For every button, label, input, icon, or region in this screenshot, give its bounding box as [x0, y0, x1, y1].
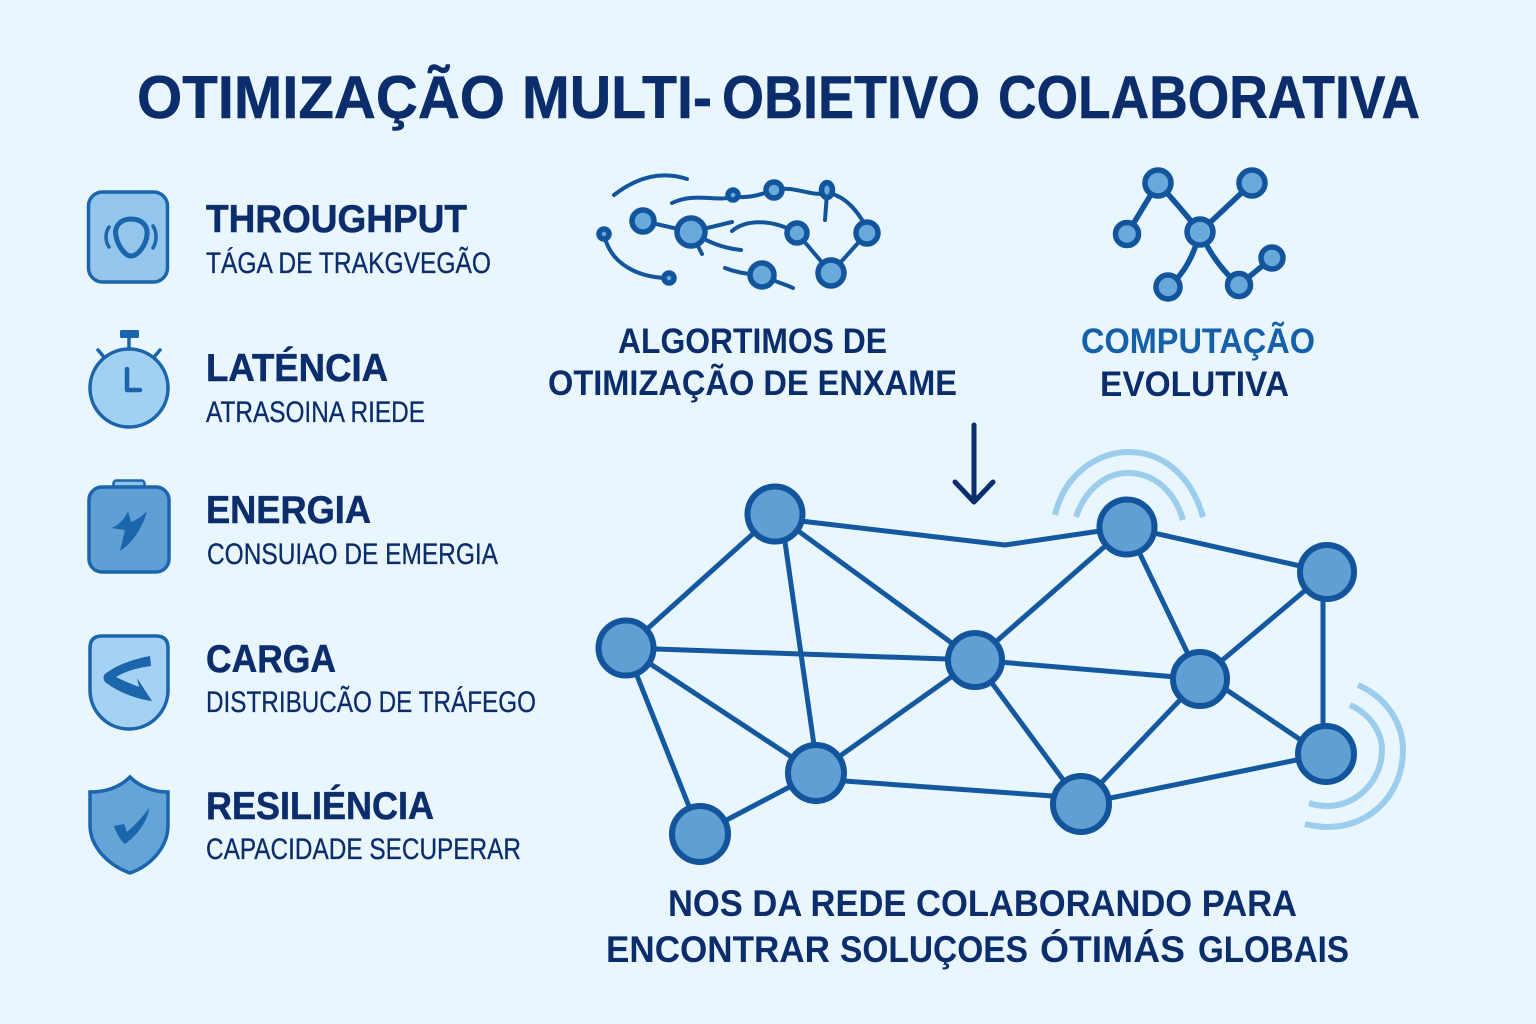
- icon: stopwatch: [90, 330, 168, 427]
- icon: battery: [89, 480, 169, 572]
- caption: network: ENCONTRAR: [606, 929, 830, 970]
- icon: load shield: [90, 636, 168, 729]
- caption: network: NOS DA REDE COLABORANDO PARA: [668, 883, 1297, 924]
- label: swarm algorithms: OTIMIZAÇÃO DE ENXAME: [548, 364, 957, 403]
- description: energy: CONSUIAO DE EMERGIA: [207, 538, 498, 571]
- description: resilience: CAPACIDADE SECUPERAR: [206, 833, 521, 866]
- title: OTIMIZAÇÃO: [137, 64, 505, 131]
- arrow: down: [955, 425, 993, 502]
- signal arcs: top node: [1055, 452, 1203, 520]
- objective: throughput: [88, 192, 491, 282]
- heading: throughput: THROUGHPUT: [206, 198, 467, 241]
- heading: energy: ENERGIA: [206, 489, 371, 532]
- caption: network: GLOBAIS: [1198, 929, 1349, 970]
- network nodes: [598, 486, 1354, 862]
- title: COLABORATIVA: [998, 64, 1420, 131]
- network diagram: [598, 452, 1403, 862]
- objective: resilience: [90, 777, 521, 873]
- heading: resilience: RESILIÉNCIA: [206, 784, 434, 828]
- caption: network: [606, 883, 1349, 970]
- panel: objectives list: [88, 192, 536, 873]
- label: swarm algorithms: ALGORTIMOS DE: [618, 322, 887, 361]
- heading: load: CARGA: [206, 638, 336, 681]
- objective: energy: [89, 480, 498, 572]
- icon: evolutionary tree: [1116, 170, 1283, 299]
- description: load: DISTRIBUCÃO DE TRÁFEGO: [206, 685, 536, 719]
- caption: network: ÓTIMÁS: [1040, 928, 1185, 970]
- icon: check shield: [90, 777, 168, 873]
- network links: [626, 514, 1327, 834]
- title: MULTI-: [522, 64, 712, 131]
- description: throughput: TÁGA DE TRAKGVEGÃO: [206, 246, 491, 280]
- label: evolutionary computing: [1081, 322, 1315, 404]
- title: OBIETIVO: [722, 64, 980, 131]
- icon: swarm particles: [599, 175, 878, 288]
- description: latency: ATRASOINA RIEDE: [206, 396, 425, 429]
- objective: latency: [90, 330, 425, 429]
- heading: latency: LATÉNCIA: [206, 346, 388, 390]
- signal arcs: right node: [1305, 685, 1403, 827]
- icon: throughput: [88, 192, 168, 282]
- title: [137, 64, 1420, 131]
- label: evolutionary computing: COMPUTAÇÃO: [1081, 322, 1315, 361]
- label: swarm algorithms: [548, 322, 957, 403]
- objective: load: [90, 636, 536, 729]
- label: evolutionary computing: EVOLUTIVA: [1100, 365, 1289, 404]
- caption: network: SOLUÇOES: [840, 929, 1028, 970]
